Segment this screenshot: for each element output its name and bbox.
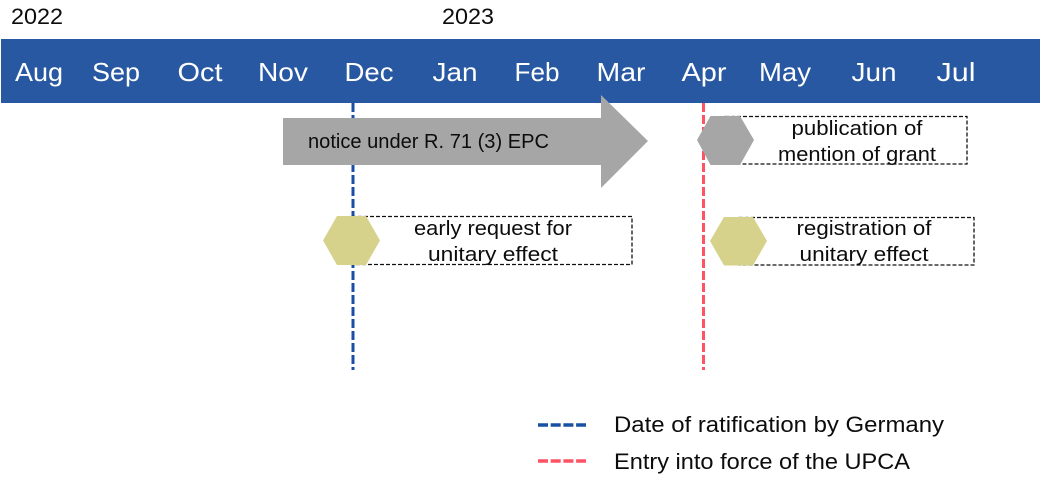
event: registration of unitary effect [710, 217, 974, 266]
month band: Oct [178, 57, 223, 87]
event: early request for unitary effect: unitary effect [428, 244, 559, 266]
event: publication of mention of grant: publication of [792, 118, 923, 140]
legend: Date of ratification by Germany [614, 412, 944, 437]
month band: Jun [852, 57, 896, 87]
legend: Entry into force of the UPCA [614, 449, 910, 474]
year labels [11, 4, 494, 29]
month band: May [759, 57, 811, 87]
event: publication of mention of grant [697, 116, 967, 166]
month band: Feb [514, 57, 560, 87]
month band: Sep [92, 57, 140, 87]
month band: Jul [936, 57, 976, 87]
event: early request for unitary effect: early request for [414, 218, 572, 240]
event: early request for unitary effect [323, 216, 632, 266]
month band: Nov [258, 57, 308, 87]
UPCA entry date line [702, 103, 705, 370]
ratification date line [352, 103, 354, 370]
month band: Jan [432, 57, 478, 87]
year labels: 2023 [442, 4, 494, 29]
month band: Mar [596, 57, 646, 87]
month band: Apr [682, 57, 727, 87]
arrow: notice period [283, 95, 648, 188]
event: registration of unitary effect: unitary effect [800, 244, 929, 266]
month band [1, 39, 1040, 103]
event: registration of unitary effect: registration of [796, 218, 932, 240]
event: publication of mention of grant: mention of grant [778, 144, 936, 166]
year labels: 2022 [11, 4, 63, 29]
month band: Aug [15, 57, 63, 87]
arrow: notice period: notice under R. 71 (3) EPC [308, 131, 549, 153]
legend [538, 412, 944, 474]
month band: Dec [344, 57, 394, 87]
